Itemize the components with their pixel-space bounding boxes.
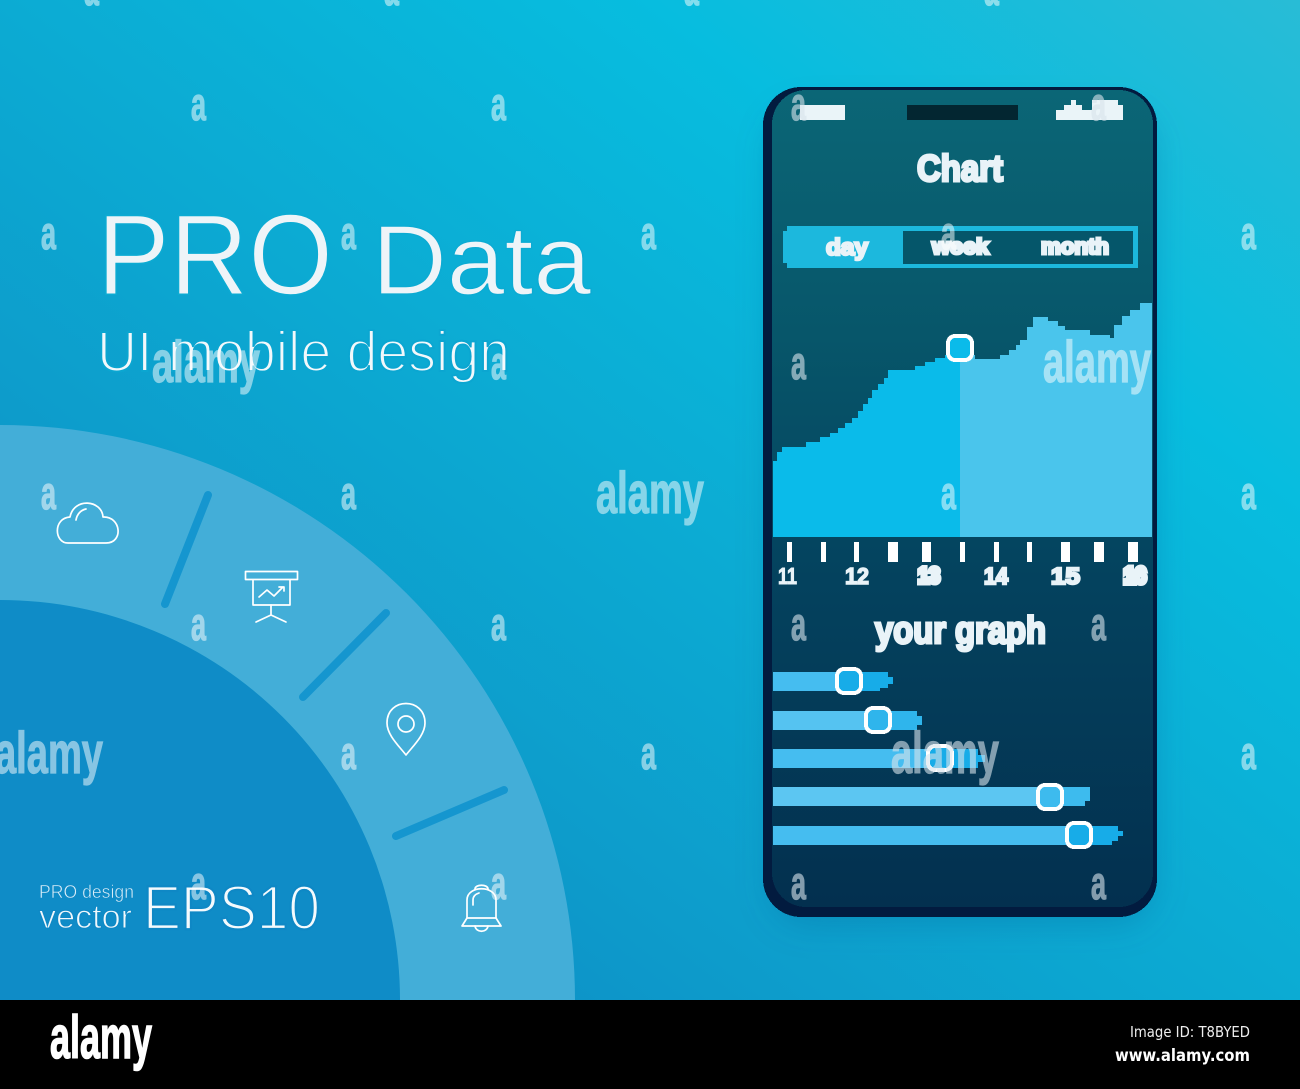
axis labels: 12 bbox=[845, 563, 869, 589]
vector label: vector bbox=[39, 898, 132, 935]
site address: www.alamy.com bbox=[1115, 1046, 1250, 1066]
phone shadow bbox=[770, 110, 1155, 925]
watermark letters: a bbox=[491, 78, 506, 130]
watermark letters: a bbox=[1091, 78, 1106, 130]
EPS10 label: EPS10 bbox=[143, 874, 320, 943]
inner quarter disc bbox=[0, 600, 400, 1000]
title: Data: Data bbox=[372, 205, 592, 315]
watermark letters: a bbox=[1091, 857, 1106, 909]
watermark letters: a bbox=[41, 467, 56, 519]
ring dividers bbox=[165, 495, 504, 836]
heading: your graph: your graph bbox=[875, 610, 1046, 652]
chart marker bbox=[948, 336, 972, 360]
area chart bbox=[773, 303, 1152, 537]
axis labels bbox=[778, 563, 1146, 589]
watermark words: alamy bbox=[1043, 330, 1151, 395]
axis labels: 11 bbox=[778, 563, 797, 589]
bar 3 bbox=[773, 746, 985, 770]
watermark letters: a bbox=[491, 857, 506, 909]
phone body bbox=[763, 87, 1157, 917]
watermark letters: a bbox=[641, 727, 656, 779]
phone mockup bbox=[763, 87, 1157, 917]
icon: map pin bbox=[387, 704, 425, 755]
watermark letters: a bbox=[641, 207, 656, 259]
badge: EPS10 vector bbox=[39, 874, 320, 943]
axis labels: 16 bbox=[1124, 563, 1146, 588]
bar 2 bbox=[773, 708, 922, 732]
watermark words: alamy bbox=[596, 461, 704, 526]
axis labels: 13 bbox=[918, 563, 940, 588]
speaker notch bbox=[907, 105, 1018, 120]
watermark words bbox=[0, 330, 1151, 786]
watermark letters: a bbox=[791, 337, 806, 389]
watermark letters: a bbox=[341, 727, 356, 779]
title: PRO: PRO bbox=[97, 192, 333, 319]
watermark letters: a bbox=[41, 207, 56, 259]
area: future bbox=[960, 303, 1152, 537]
axis labels: 15 bbox=[1051, 563, 1080, 589]
bar 5 bbox=[773, 823, 1123, 847]
watermark letters: a bbox=[791, 598, 806, 650]
bar chart bbox=[773, 669, 1123, 847]
watermark letters: a bbox=[491, 337, 506, 389]
area: past bbox=[773, 355, 960, 537]
watermark letters: a bbox=[941, 207, 956, 259]
watermark letters: a bbox=[341, 207, 356, 259]
watermark letters: a bbox=[491, 598, 506, 650]
status time bbox=[800, 105, 845, 120]
axis ticks bbox=[787, 542, 1138, 562]
heading: Chart: Chart bbox=[917, 148, 1003, 189]
tab bar bbox=[783, 226, 1138, 268]
translucent ring bbox=[0, 425, 575, 1000]
icon: cloud bbox=[57, 503, 118, 543]
watermark letters: a bbox=[341, 467, 356, 519]
subtitle: UI mobile design bbox=[97, 320, 510, 384]
watermark letters: a bbox=[191, 78, 206, 130]
inactive tabs area bbox=[903, 231, 1133, 264]
PRO design label: PRO design bbox=[39, 882, 134, 902]
bar 4 bbox=[773, 785, 1090, 809]
bar 1 bbox=[773, 669, 893, 693]
footer logo: alamy bbox=[50, 1004, 152, 1071]
watermark letters: a bbox=[1091, 598, 1106, 650]
tab bar frame bbox=[783, 226, 1138, 268]
tab: week: week bbox=[931, 234, 990, 259]
tab: month: month bbox=[1041, 234, 1109, 259]
watermark letters: a bbox=[1241, 467, 1256, 519]
watermark letters: a bbox=[941, 467, 956, 519]
image id: Image ID: T8BYED bbox=[1130, 1023, 1250, 1041]
watermark letters: a bbox=[1241, 207, 1256, 259]
watermark letters bbox=[41, 0, 1256, 909]
watermark letters: a bbox=[1241, 727, 1256, 779]
watermark letters: a bbox=[791, 78, 806, 130]
watermark words: alamy bbox=[891, 721, 999, 786]
status icons bbox=[1056, 100, 1123, 120]
footer bar bbox=[0, 1000, 1300, 1089]
phone screen bbox=[772, 90, 1153, 907]
watermark letters: a bbox=[791, 857, 806, 909]
watermark letters: a bbox=[191, 857, 206, 909]
axis labels: 14 bbox=[984, 563, 1008, 589]
tab: day: day bbox=[826, 234, 868, 260]
panel: quarter circle menu bbox=[0, 425, 575, 1000]
watermark words: alamy bbox=[152, 330, 260, 395]
icon: bell bbox=[462, 885, 501, 931]
watermark letters: a bbox=[191, 598, 206, 650]
icon: presentation board bbox=[246, 572, 298, 622]
